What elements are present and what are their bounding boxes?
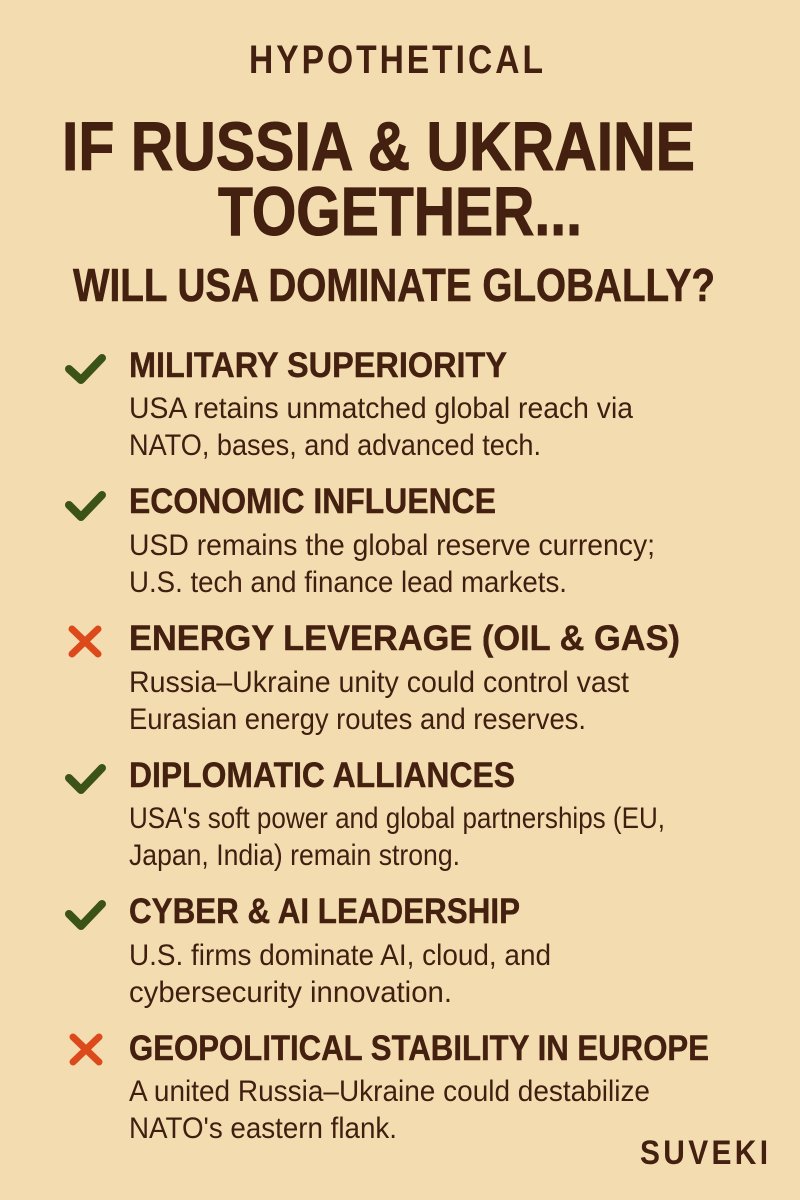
description: USA retains unmatched global reach via — [129, 392, 634, 425]
icon: check mark — [69, 495, 102, 517]
title: IF RUSSIA & UKRAINE — [62, 108, 695, 185]
title: TOGETHER... — [218, 173, 582, 250]
heading: ENERGY LEVERAGE (OIL & GAS) — [129, 619, 680, 658]
description — [129, 802, 665, 872]
item: economic influence — [69, 482, 655, 599]
description — [129, 392, 634, 462]
description — [129, 666, 629, 736]
heading: GEOPOLITICAL STABILITY IN EUROPE — [129, 1029, 709, 1068]
title — [62, 108, 695, 250]
description: USD remains the global reserve currency; — [129, 529, 655, 562]
description: Russia–Ukraine unity could control vast — [129, 666, 629, 699]
description: Eurasian energy routes and reserves. — [129, 703, 586, 736]
description: NATO, bases, and advanced tech. — [129, 429, 541, 462]
description — [129, 529, 655, 599]
item: geopolitical stability — [73, 1029, 709, 1145]
heading: CYBER & AI LEADERSHIP — [129, 892, 520, 931]
description: Japan, India) remain strong. — [129, 839, 460, 872]
item: energy leverage — [72, 619, 680, 736]
description: U.S. firms dominate AI, cloud, and — [129, 939, 551, 972]
item: diplomatic alliances — [69, 756, 665, 872]
description: cybersecurity innovation. — [129, 976, 452, 1009]
item: military superiority — [69, 346, 634, 462]
icon: check mark — [69, 904, 102, 926]
description — [129, 939, 551, 1009]
heading: ECONOMIC INFLUENCE — [129, 482, 496, 521]
icon: check mark — [69, 358, 102, 380]
heading: DIPLOMATIC ALLIANCES — [129, 756, 515, 795]
description: U.S. tech and finance lead markets. — [129, 566, 567, 599]
icon: cross mark — [72, 629, 98, 654]
description: NATO's eastern flank. — [129, 1112, 397, 1145]
description: A united Russia–Ukraine could destabilize — [129, 1075, 650, 1108]
description — [129, 1075, 650, 1145]
heading: MILITARY SUPERIORITY — [129, 346, 507, 385]
icon: check mark — [69, 768, 102, 790]
item: cyber and AI leadership — [69, 892, 551, 1009]
brand: suveki: SUVEKI — [640, 1133, 768, 1171]
description: USA's soft power and global partnerships (EU, — [129, 802, 665, 835]
icon: cross mark — [73, 1037, 99, 1062]
eyebrow: hypothetical: HYPOTHETICAL — [249, 37, 543, 82]
